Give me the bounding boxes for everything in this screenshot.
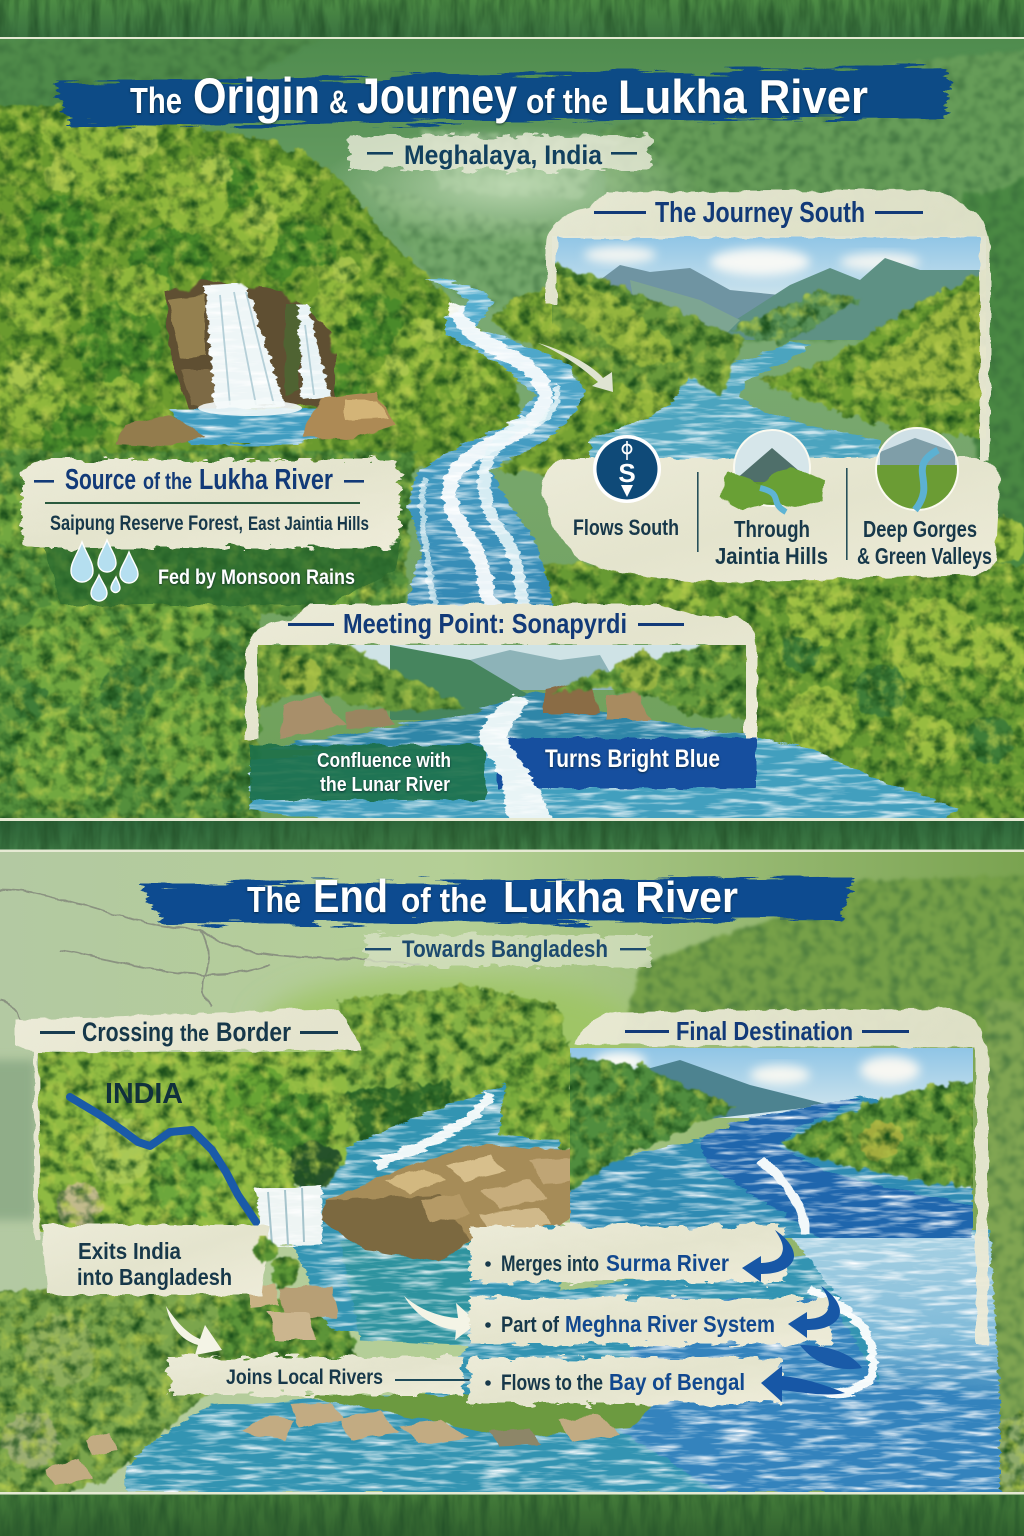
heading: Crossing the Border: Crossing	[82, 1017, 174, 1047]
arrow: from ledge to river system	[404, 1296, 478, 1340]
inset: crossing the border map	[30, 1045, 345, 1240]
title banner: end of the river: End	[313, 870, 388, 922]
river: lower waters	[125, 1085, 1000, 1493]
divider	[846, 468, 848, 560]
panel: end of the river	[0, 852, 1024, 1503]
list item: Flows to the Bay of Bengal: Flows to the	[501, 1370, 603, 1395]
label: Confluence with the Lunar River: the Lunar River	[320, 774, 450, 796]
label: Turns Bright Blue: Turns Bright Blue	[545, 745, 720, 773]
list item: Flows to the Bay of Bengal: Bay of Bengal	[609, 1369, 745, 1395]
caption: Flows South: Flows South	[573, 515, 679, 540]
brush stroke	[54, 67, 950, 126]
arrow: to the Bay of Bengal	[761, 1366, 845, 1402]
paper frame of destination panel	[575, 1008, 988, 1345]
river: winding main channel	[405, 278, 585, 610]
top green band	[0, 0, 1024, 40]
list item: Part of Meghna River System: Part of	[501, 1312, 560, 1337]
title text: The	[130, 80, 182, 121]
paper strip of journey captions	[542, 458, 1000, 582]
icon: Jaintia Hills vignette	[720, 430, 826, 512]
text: Fed by Monsoon Rains: Fed by Monsoon Rains	[158, 566, 355, 589]
middle green band	[0, 818, 1024, 852]
panel: Crossing the Border	[15, 1008, 479, 1395]
label: Confluence with the Lunar River	[250, 745, 485, 800]
title banner: end of the river: of the	[401, 882, 487, 920]
panel: The Journey South	[542, 190, 1000, 582]
list item: Flows to the Bay of Bengal	[470, 1358, 780, 1404]
list item: Part of Meghna River System: Meghna River System	[565, 1311, 775, 1337]
paper of meeting panel	[246, 604, 757, 740]
heading: The Journey South	[594, 201, 923, 228]
panel: Meeting Point Sonapyrdi	[246, 604, 960, 830]
subtitle: Meghalaya, India: Meghalaya, India	[404, 140, 603, 170]
label: Exits India into Bangladesh: Exits India	[78, 1238, 181, 1264]
title banner: end of the river	[140, 870, 855, 924]
icon: rain drops	[71, 540, 138, 601]
list item: Part of Meghna River System	[470, 1298, 830, 1344]
heading: Crossing the Border: the	[180, 1020, 209, 1046]
icon: south compass: S	[618, 458, 636, 488]
swirl pool	[800, 1345, 862, 1369]
list item: Merges into Surma River: Merges into	[501, 1251, 599, 1276]
heading: Source of the Lukha River: of the	[143, 468, 192, 494]
list item: Merges into Surma River	[470, 1226, 785, 1282]
arrow: exits to local rivers	[166, 1306, 222, 1355]
background: hill between river and inset	[490, 290, 709, 480]
title banner: end of the river: The	[247, 879, 301, 920]
map label: INDIA: INDIA	[105, 1078, 183, 1110]
label: Turns Bright Blue	[480, 695, 756, 825]
rule	[45, 502, 360, 504]
waterfall source scene	[101, 256, 398, 454]
paper of source panel	[22, 460, 400, 548]
bottom island of rocks	[45, 1395, 660, 1486]
panel: Source of the Lukha River	[22, 460, 400, 605]
heading: Source of the Lukha River: Lukha River	[199, 464, 333, 496]
label: Exits India into Bangladesh	[42, 1225, 270, 1295]
heading: Source of the Lukha River: Source	[65, 464, 136, 496]
label: Joins Local Rivers: Joins Local Rivers	[226, 1366, 383, 1389]
icon: south compass	[593, 435, 661, 503]
heading: Crossing the Border	[40, 1017, 338, 1047]
arrow: into Surma River	[742, 1230, 794, 1282]
heading: Crossing the Border: Border	[216, 1017, 291, 1047]
text: Saipung Reserve Forest: East Jaintia Hills	[248, 514, 369, 535]
lake	[250, 735, 960, 830]
label: Exits India into Bangladesh: into Bangladesh	[77, 1264, 232, 1290]
subtitle: Meghalaya, India	[350, 136, 650, 170]
river path on map	[70, 1097, 256, 1222]
label: Joins Local Rivers	[168, 1357, 479, 1395]
heading: Meeting Point Sonapyrdi: Meeting Point: Sonapyrdi	[343, 608, 627, 639]
bottom green band	[0, 1492, 1024, 1536]
title banner	[54, 67, 950, 126]
heading: The Journey South: The Journey South	[655, 197, 865, 229]
heading: Source of the Lukha River	[34, 464, 364, 496]
divider	[697, 472, 699, 552]
label: Confluence with the Lunar River: Confluence with	[317, 750, 451, 772]
foliage at label edge	[253, 1238, 301, 1288]
paper frame of crossing panel	[15, 1008, 362, 1240]
panel: Final Destination	[404, 1008, 988, 1404]
caption: Deep Gorges and Green Valleys	[857, 516, 992, 569]
title text: &	[329, 84, 348, 120]
caption: Through Jaintia Hills: Jaintia Hills	[715, 543, 828, 569]
title text: Lukha River	[618, 70, 868, 123]
heading: Final Destination: Final Destination	[676, 1016, 853, 1046]
caption: Through Jaintia Hills	[715, 516, 828, 569]
dark green panel foot	[42, 540, 400, 605]
background: lower forest	[0, 450, 1024, 830]
background: misty valley and distant hills	[0, 39, 1024, 818]
inset: confluence view	[250, 640, 755, 750]
paper frame of journey panel	[546, 190, 990, 460]
title banner: end of the river: Lukha River	[503, 873, 738, 922]
title text: of the	[526, 83, 608, 121]
inset: final destination scene	[560, 1048, 985, 1260]
panel: origin and journey	[0, 39, 1024, 830]
arrow: river heading south	[538, 343, 613, 392]
title text: Journey	[357, 68, 517, 124]
caption: Deep Gorges and Green Valleys: Deep Gorges	[863, 516, 977, 542]
text: Saipung Reserve Forest: Saipung Reserve Forest,	[50, 512, 243, 535]
rock ledge and waterfall	[250, 1145, 600, 1340]
subtitle: Towards Bangladesh: Towards Bangladesh	[402, 936, 608, 963]
icon: gorges vignette	[875, 428, 959, 513]
background: pale map land and forest	[0, 852, 1024, 1503]
list item: Merges into Surma River: Surma River	[606, 1250, 729, 1276]
arrow: into Meghna system	[788, 1286, 840, 1338]
cascade	[480, 695, 552, 825]
caption: Through Jaintia Hills: Through	[734, 516, 810, 542]
title text: Origin	[193, 68, 320, 124]
inset: valley view	[540, 236, 1000, 470]
background: left forested hillside	[0, 104, 520, 478]
